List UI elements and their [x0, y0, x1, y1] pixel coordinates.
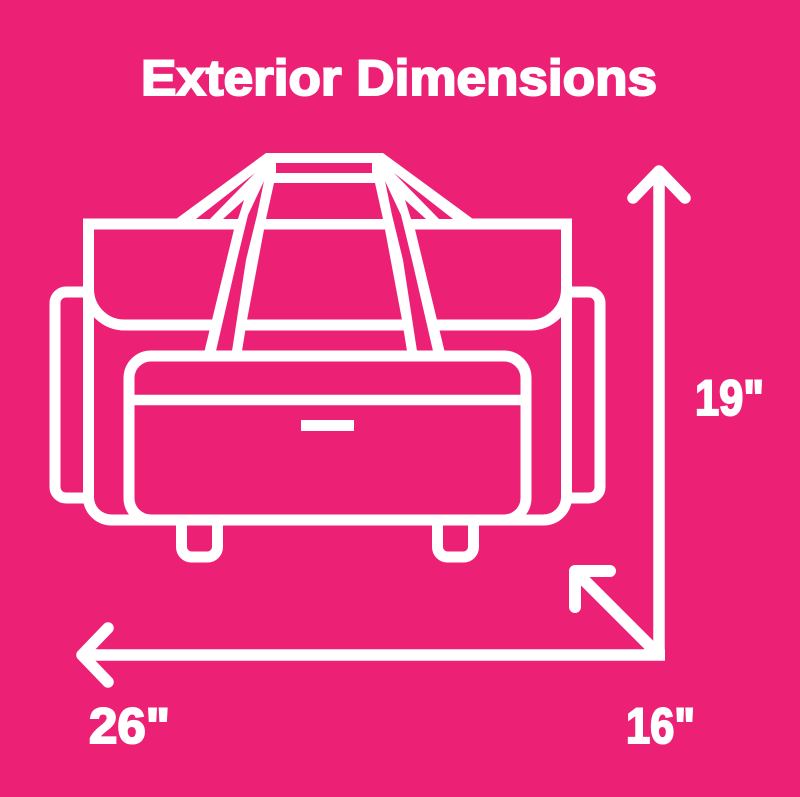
right side pocket [567, 292, 600, 498]
label: 16 inches: 16" [626, 698, 695, 754]
opening under grip [266, 183, 383, 219]
label: 26 inches: 26" [89, 698, 170, 754]
label: 19 inches: 19" [695, 370, 764, 426]
front pocket [129, 356, 526, 520]
right strap slit [385, 181, 433, 351]
pocket divider [129, 395, 526, 405]
icon: duffel bag [55, 153, 600, 557]
title: Exterior Dimensions [141, 50, 657, 106]
handle cut-outs [196, 163, 453, 351]
handle grip opening [276, 163, 372, 173]
height arrow [633, 171, 685, 655]
handle silhouette [176, 153, 473, 229]
top flap [88, 224, 566, 325]
left foot [182, 520, 218, 557]
right strap [373, 160, 444, 351]
bag body [88, 224, 566, 520]
right foot [438, 520, 474, 557]
right brace gaps [394, 173, 453, 219]
bag outlines [55, 224, 600, 557]
zipper pull [301, 420, 354, 431]
left strap slit [216, 181, 264, 351]
depth arrow [575, 571, 655, 651]
left strap [204, 160, 276, 351]
width arrow [82, 628, 665, 682]
left side pocket [55, 292, 88, 498]
left brace gaps [196, 173, 255, 219]
